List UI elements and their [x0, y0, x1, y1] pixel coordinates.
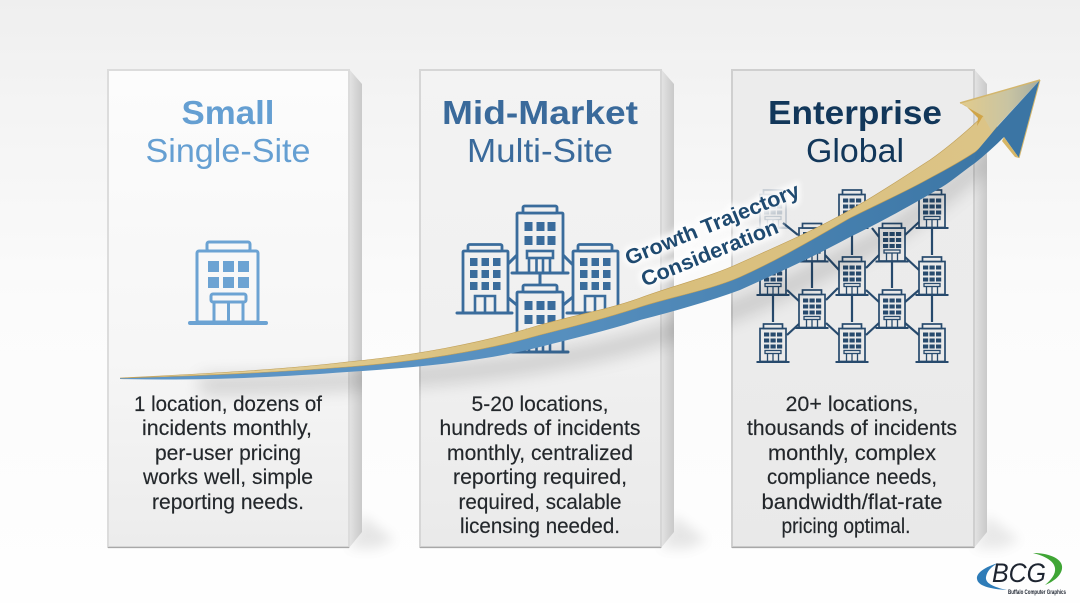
text block: small description: per-user pricing — [155, 442, 301, 465]
arrow label: Growth Trajectory Consideration: Growth Trajectory — [622, 179, 803, 270]
arrow label: Growth Trajectory Consideration: Consideration — [638, 216, 782, 292]
text block: enterprise description: 20+ locations, — [786, 393, 918, 416]
text block: mid-market description: hundreds of incidents — [440, 417, 640, 440]
text block: mid-market description: required, scalable — [458, 491, 622, 514]
icon: single building — [190, 242, 266, 323]
heading: Enterprise: Enterprise — [768, 94, 942, 131]
text block: enterprise description: bandwidth/flat-rate — [762, 491, 942, 514]
panel: enterprise global — [732, 69, 1020, 549]
text block: enterprise description: monthly, complex — [768, 442, 937, 465]
text block: mid-market description: reporting required, — [453, 466, 627, 489]
icon: network of buildings — [756, 190, 948, 362]
subheading: Global: Global — [806, 132, 904, 169]
logo: BCG Buffalo Computer Graphics — [977, 553, 1066, 596]
arrow shaft: gold top — [120, 116, 997, 378]
text block: small description: incidents monthly, — [142, 417, 312, 440]
arrow head — [960, 80, 1040, 160]
arrow label: Growth Trajectory Consideration: Growth Trajectory — [622, 179, 803, 270]
text block: small description: reporting needs. — [152, 491, 304, 514]
text block: small description: works well, simple — [142, 466, 313, 489]
heading: Small: Small — [182, 94, 274, 131]
arrow label: Growth Trajectory Consideration: Consideration — [638, 216, 782, 292]
text block: enterprise description: compliance needs, — [767, 466, 937, 489]
text block: enterprise description — [747, 393, 957, 538]
text block: small description — [134, 393, 322, 514]
subheading: Single-Site: Single-Site — [146, 132, 310, 169]
subheading: Multi-Site: Multi-Site — [467, 132, 613, 169]
icon: four connected buildings — [457, 206, 622, 352]
growth arrow — [120, 80, 1040, 385]
text block: mid-market description — [440, 393, 640, 538]
text block: enterprise description: pricing optimal. — [782, 515, 910, 538]
arrow shaft: blue underside — [120, 116, 1004, 380]
logo green swoosh — [1033, 553, 1062, 585]
heading: Mid-Market: Mid-Market — [442, 94, 638, 131]
text block: mid-market description: monthly, centralized — [447, 442, 633, 465]
text block: mid-market description: licensing needed. — [460, 515, 620, 538]
logo blue swoosh — [977, 563, 1007, 590]
text block: small description: 1 location, dozens of — [134, 393, 322, 416]
panel: mid-market multi-site — [420, 69, 707, 549]
panel: small single-site — [108, 69, 395, 549]
text block: mid-market description: 5-20 locations, — [472, 393, 608, 416]
logo letters: BCG — [992, 558, 1046, 588]
text block: enterprise description: thousands of incidents — [747, 417, 957, 440]
